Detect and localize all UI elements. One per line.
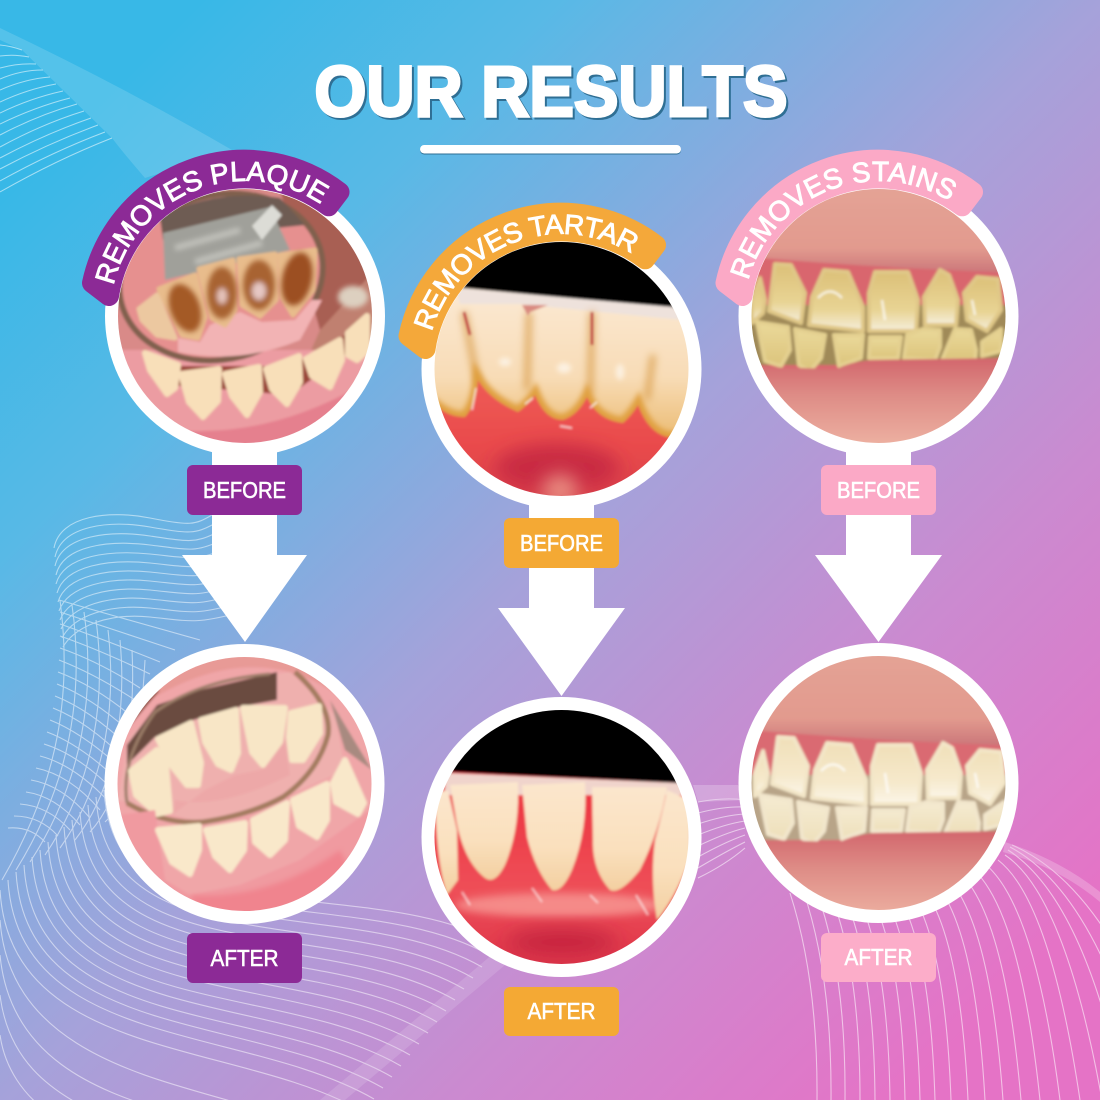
label: before plaque (187, 465, 302, 515)
label: before plaque: BEFORE (203, 477, 286, 503)
ribbon: removes stains: REMOVES STAINS (730, 161, 956, 279)
label: before tartar (504, 518, 619, 568)
panel: removes plaque (82, 150, 385, 983)
label: before tartar: BEFORE (520, 530, 603, 556)
arrow: tartar before to after (498, 490, 625, 696)
title underline (420, 145, 681, 154)
label: after stains (821, 933, 936, 982)
photo: stains before (738, 176, 1020, 456)
label: after tartar (504, 987, 619, 1036)
title: OUR RESULTS (314, 53, 788, 132)
label: after plaque (187, 933, 302, 983)
panel: removes tartar (398, 202, 702, 1036)
photo: tartar after (422, 697, 702, 977)
ribbon: removes tartar: REMOVES TARTAR (414, 214, 638, 330)
label: before stains: BEFORE (837, 477, 920, 503)
photo: plaque after (104, 644, 384, 924)
wave pattern: top left (0, 28, 232, 192)
wave pattern: bottom right (693, 785, 1100, 1100)
photo: stains after (733, 643, 1023, 923)
photo: plaque before (105, 188, 385, 452)
arrow: stains before to after (815, 440, 942, 642)
label: after plaque: AFTER (210, 945, 278, 971)
ribbon: removes plaque: REMOVES PLAQUE (94, 162, 330, 284)
wave pattern: left and bottom left (0, 515, 505, 1100)
label: after stains: AFTER (844, 944, 912, 970)
photo: tartar before (422, 229, 702, 509)
panel: removes stains (716, 150, 1018, 982)
label: after tartar: AFTER (528, 998, 596, 1024)
label: before stains (821, 465, 936, 515)
arrow: plaque before to after (182, 440, 307, 642)
